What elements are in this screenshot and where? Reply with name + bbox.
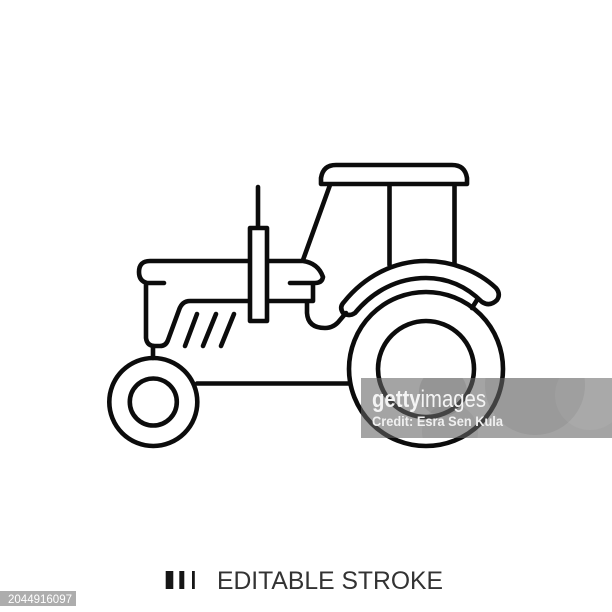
cab lower curve bbox=[307, 302, 346, 328]
caption: editable stroke: EDITABLE STROKE bbox=[217, 567, 443, 595]
image id tag bbox=[0, 591, 76, 606]
cab roof bbox=[321, 165, 467, 184]
chassis axle line bbox=[197, 381, 349, 386]
fender bracket bbox=[472, 300, 477, 308]
rear fender bbox=[341, 261, 499, 315]
watermark credit: Credit: Esra Sen Kula bbox=[372, 414, 503, 429]
icon: tractor line drawing bbox=[109, 165, 503, 446]
front wheel bbox=[109, 346, 197, 446]
image id tag: 2044916097 bbox=[8, 594, 72, 606]
cab posts bbox=[303, 185, 454, 265]
hood and engine body bbox=[139, 261, 323, 346]
radiator grille vents bbox=[185, 314, 234, 346]
infographic canvas bbox=[0, 162, 612, 606]
exhaust stack bbox=[250, 187, 267, 321]
watermark band bbox=[361, 378, 612, 438]
watermark logo text: gettyimages bbox=[372, 386, 486, 413]
rear wheel bbox=[349, 292, 503, 446]
icon: stroke weight bars bbox=[166, 571, 195, 589]
